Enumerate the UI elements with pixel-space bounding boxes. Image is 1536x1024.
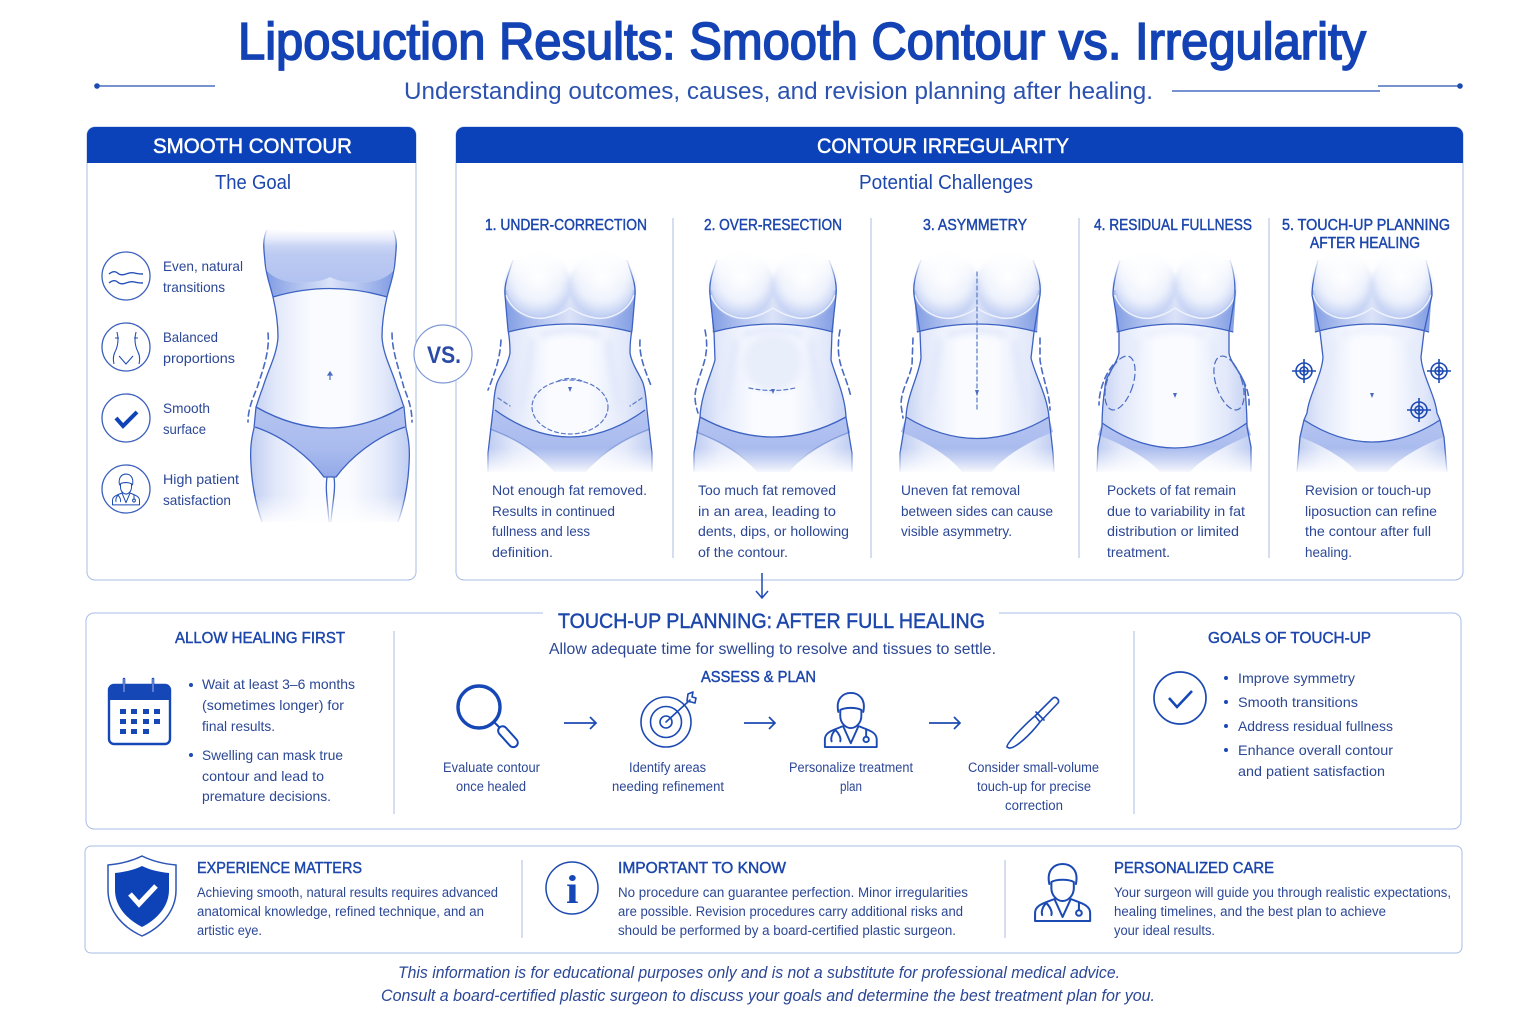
note: experience matters: artistic eye. <box>197 923 262 938</box>
note: important to know: should be performed by a board-certified plastic surgeon. <box>618 923 956 938</box>
benefit: even transitions: transitions <box>163 279 225 295</box>
note: important to know: IMPORTANT TO KNOW <box>618 860 787 877</box>
icon: shield <box>108 856 176 936</box>
icon: magnifier <box>458 686 520 749</box>
column: allow healing first: final results. <box>202 718 275 734</box>
column: allow healing first: premature decisions. <box>202 788 331 804</box>
icon: target right <box>1427 359 1451 383</box>
icon: calendar <box>109 679 170 744</box>
column: assess and plan: correction <box>1005 798 1063 813</box>
icon: target lower <box>1407 398 1431 422</box>
column: touch-up planning: liposuction can refine <box>1305 503 1437 519</box>
benefit: smooth surface <box>102 394 210 442</box>
title: Liposuction Results: Smooth Contour vs. Irregularity <box>238 13 1366 71</box>
arrow: down to touch-up planning <box>756 573 768 598</box>
benefit: balanced proportions: Balanced <box>163 329 218 345</box>
note: important to know: No procedure can guarantee perfection. Minor irregularities <box>618 885 968 900</box>
column: assess and plan: Identify areas <box>629 760 706 775</box>
note: personalized care <box>1035 860 1451 938</box>
column: residual fullness <box>1085 217 1265 560</box>
note: personalized care: PERSONALIZED CARE <box>1114 860 1274 877</box>
heading: contour irregularity: CONTOUR IRREGULARITY <box>817 135 1069 158</box>
benefit: even transitions <box>102 252 243 300</box>
column: over-resection: of the contour. <box>698 544 788 560</box>
column: touch-up planning: AFTER HEALING <box>1310 235 1420 252</box>
benefit: smooth surface: surface <box>163 421 206 437</box>
column: asymmetry <box>887 217 1067 539</box>
column: goals of touch-up: Smooth transitions <box>1238 694 1358 710</box>
column: under-correction: Results in continued <box>492 503 615 519</box>
note: experience matters <box>108 856 498 938</box>
column: assess and plan: ASSESS & PLAN <box>701 669 816 686</box>
icon: info: i <box>566 867 578 912</box>
panel: touch-up planning <box>86 610 1461 829</box>
column: touch-up planning: healing. <box>1305 544 1352 560</box>
column: goals of touch-up: Enhance overall contour <box>1238 742 1393 758</box>
column: assess and plan: once healed <box>456 779 526 794</box>
column: under-correction: 1. UNDER-CORRECTION <box>485 217 647 234</box>
column: allow healing first: (sometimes longer) for <box>202 697 344 713</box>
column: allow healing first: ALLOW HEALING FIRST <box>175 630 345 647</box>
column: under-correction <box>480 217 660 560</box>
icon: target <box>641 692 696 747</box>
icon: info <box>546 862 598 914</box>
column: under-correction: definition. <box>492 544 553 560</box>
illustration: residual fullness torso <box>1085 250 1265 474</box>
column: under-correction: Not enough fat removed. <box>492 482 647 498</box>
vs badge: VS. <box>427 342 461 369</box>
benefit: patient satisfaction: High patient <box>163 471 239 487</box>
column: assess and plan: plan <box>840 779 862 794</box>
column: residual fullness: 4. RESIDUAL FULLNESS <box>1094 217 1252 234</box>
column: residual fullness: Pockets of fat remain <box>1107 482 1236 498</box>
column: goals of touch-up: Address residual fullness <box>1238 718 1393 734</box>
column: touch-up planning: 5. TOUCH-UP PLANNING <box>1282 217 1450 234</box>
column: touch-up planning: Revision or touch-up <box>1305 482 1431 498</box>
column: assess and plan: Evaluate contour <box>443 760 540 775</box>
note: personalized care: your ideal results. <box>1114 923 1215 938</box>
illustration: touch-up torso <box>1282 250 1462 474</box>
note: personalized care: healing timelines, and the best plan to achieve <box>1114 904 1386 919</box>
column: asymmetry: Uneven fat removal <box>901 482 1020 498</box>
benefit: patient satisfaction <box>102 465 239 513</box>
subtitle: Understanding outcomes, causes, and revision planning after healing. <box>404 78 1153 105</box>
illustration: under-correction torso <box>480 250 660 474</box>
panel: smooth contour <box>87 127 416 580</box>
illustration: asymmetry torso <box>887 250 1067 474</box>
illustration: over-resection torso <box>683 250 863 474</box>
column: assess and plan: Consider small-volume <box>968 760 1099 775</box>
column: allow healing first: contour and lead to <box>202 768 324 784</box>
benefit: smooth surface: Smooth <box>163 400 210 416</box>
heading: smooth contour: SMOOTH CONTOUR <box>153 135 352 158</box>
icon: scalpel <box>1007 697 1059 748</box>
column: goals of touch-up: Improve symmetry <box>1238 670 1355 686</box>
benefit: balanced proportions <box>102 323 235 371</box>
column: touch-up planning: the contour after full <box>1305 523 1431 539</box>
column: over-resection <box>683 217 863 560</box>
heading: touch-up planning: TOUCH-UP PLANNING: AFTER FULL HEALING <box>558 610 985 633</box>
column: assess and plan <box>443 669 1099 813</box>
column: asymmetry: visible asymmetry. <box>901 523 1012 539</box>
benefit: even transitions: Even, natural <box>163 258 243 274</box>
column: residual fullness: due to variability in fat <box>1107 503 1245 519</box>
benefit: balanced proportions: proportions <box>163 350 235 366</box>
column: goals of touch-up <box>1154 630 1393 779</box>
icon: check circle <box>1154 672 1206 724</box>
column: over-resection: Too much fat removed <box>698 482 836 498</box>
column: over-resection: 2. OVER-RESECTION <box>704 217 842 234</box>
note: experience matters: anatomical knowledge, refined technique, and an <box>197 904 484 919</box>
column: touch-up planning <box>1282 217 1462 560</box>
icon: doctor <box>825 693 877 747</box>
column: residual fullness: treatment. <box>1107 544 1170 560</box>
column: over-resection: dents, dips, or hollowing <box>698 523 849 539</box>
icon: target left <box>1292 359 1316 383</box>
column: asymmetry: 3. ASYMMETRY <box>923 217 1027 234</box>
column: allow healing first <box>109 630 355 804</box>
column: over-resection: in an area, leading to <box>698 503 836 519</box>
column: assess and plan: Personalize treatment <box>789 760 913 775</box>
column: goals of touch-up: and patient satisfaction <box>1238 763 1385 779</box>
arrow: step three <box>929 717 960 729</box>
disclaimer: This information is for educational purposes only and is not a substitute for professional medical advice. <box>398 964 1120 982</box>
column: assess and plan: touch-up for precise <box>977 779 1091 794</box>
subheading: the goal: The Goal <box>215 172 291 194</box>
subheading: potential challenges: Potential Challenges <box>859 172 1033 194</box>
disclaimer: Consult a board-certified plastic surgeon to discuss your goals and determine the best treatment plan for you. <box>381 987 1155 1005</box>
note: personalized care: Your surgeon will guide you through realistic expectations, <box>1114 885 1451 900</box>
note: important to know <box>546 860 968 938</box>
column: asymmetry: between sides can cause <box>901 503 1053 519</box>
column: allow healing first: Wait at least 3–6 months <box>202 676 355 692</box>
note: experience matters: Achieving smooth, natural results requires advanced <box>197 885 498 900</box>
column: under-correction: fullness and less <box>492 523 590 539</box>
column: allow healing first: Swelling can mask true <box>202 747 343 763</box>
panel: key notes <box>85 846 1462 953</box>
intro sentence: Allow adequate time for swelling to resolve and tissues to settle. <box>549 641 996 658</box>
illustration: smooth torso <box>245 222 415 526</box>
panel: contour irregularity <box>456 127 1463 580</box>
note: experience matters: EXPERIENCE MATTERS <box>197 860 362 877</box>
note: important to know: are possible. Revision procedures carry additional risks and <box>618 904 963 919</box>
arrow: step one <box>564 717 596 729</box>
vs badge <box>414 325 472 383</box>
icon: doctor <box>1035 864 1090 921</box>
column: residual fullness: distribution or limited <box>1107 523 1239 539</box>
disclaimer <box>381 964 1155 1005</box>
column: goals of touch-up: GOALS OF TOUCH-UP <box>1208 630 1371 647</box>
arrow: step two <box>744 717 775 729</box>
benefit: patient satisfaction: satisfaction <box>163 492 231 508</box>
column: assess and plan: needing refinement <box>612 779 724 794</box>
